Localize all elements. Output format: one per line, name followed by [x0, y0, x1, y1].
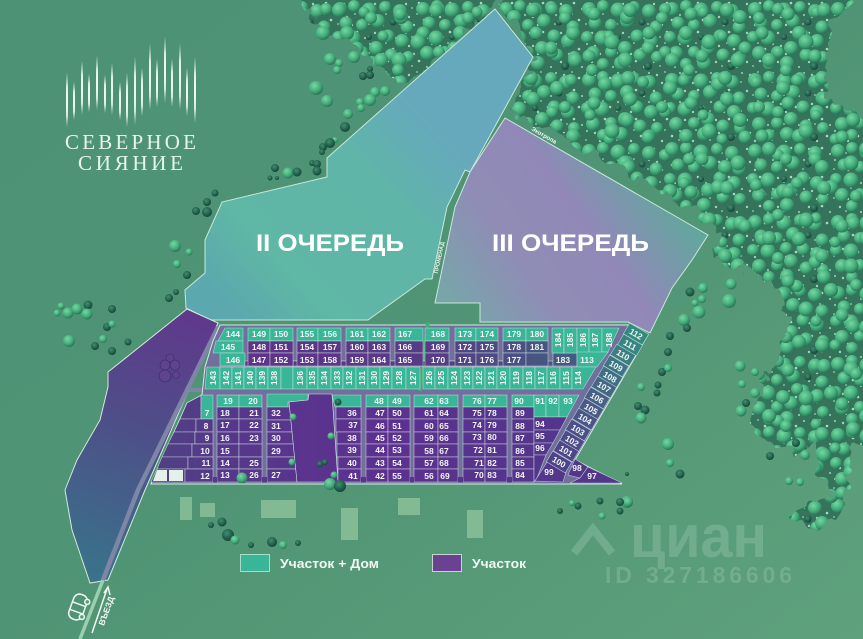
upper purple rows: 170 [431, 355, 445, 365]
watermark [574, 503, 792, 588]
plot map backing with access roads [151, 325, 648, 484]
upper teal row: 155 [300, 329, 314, 339]
trees inside the plots [236, 398, 346, 492]
lower plots, columns 36 to 90: 44 [375, 445, 385, 455]
logo wordmark [65, 130, 196, 175]
upper purple rows: 177 [507, 355, 521, 365]
lower plots, columns 36 to 90: 65 [439, 421, 449, 431]
long teal row: 134 [319, 371, 329, 385]
long teal row: 136 [295, 371, 305, 385]
purple tree cluster [159, 354, 180, 382]
diagonal strip plots 100 to 112: 100 [550, 454, 568, 470]
upper teal row: 167 [398, 329, 412, 339]
long teal row: 115 [561, 371, 571, 385]
lower plots, columns 36 to 90: 52 [392, 433, 402, 443]
lower plots, columns 36 to 90: 60 [424, 421, 434, 431]
upper purple rows: 165 [398, 355, 412, 365]
long teal row: 117 [536, 371, 546, 385]
lower plots, columns 13 to 32: 17 [220, 420, 230, 430]
plots 91 to 99: 99 [544, 467, 554, 477]
upper teal row: 145 [221, 342, 235, 352]
long teal row: 130 [369, 371, 379, 385]
lower plots, columns 36 to 90: 78 [487, 408, 497, 418]
plots 91 to 99: 96 [535, 443, 545, 453]
upper right teal plots [552, 328, 619, 367]
plots 91 to 99: 92 [548, 396, 558, 406]
lower plots, columns 36 to 90: 62 [424, 396, 434, 406]
upper purple rows: 176 [480, 355, 494, 365]
long teal row: 123 [462, 371, 472, 385]
upper purple rows: 181 [530, 342, 544, 352]
long teal row: 116 [548, 371, 558, 385]
upper purple rows: 171 [458, 355, 472, 365]
long teal row: 118 [524, 371, 534, 385]
lower plots, columns 13 to 32: 29 [271, 446, 281, 456]
lower plots, columns 36 to 90: 57 [424, 458, 434, 468]
upper purple rows: 160 [350, 342, 364, 352]
long teal row: 114 [573, 371, 583, 385]
upper purple rows: 178 [507, 342, 521, 352]
upper purple rows: 166 [398, 342, 412, 352]
diagonal strip plots 100 to 112: 111 [622, 337, 638, 353]
forest [302, 0, 863, 530]
lower plots, columns 36 to 90: 69 [440, 471, 450, 481]
watermark: ID 327186606 [605, 562, 792, 588]
phase II heading: II ОЧЕРЕДЬ [256, 230, 404, 257]
diagonal strip plots 100 to 112: 104 [576, 411, 594, 427]
lower plots, columns 13 to 32: 20 [248, 396, 258, 406]
upper teal row: 150 [274, 329, 288, 339]
upper right teal plots: 188 [604, 333, 614, 347]
upper teal row: 174 [480, 329, 494, 339]
long teal row [205, 367, 596, 389]
upper purple rows: 153 [300, 355, 314, 365]
lower plots, columns 36 to 90: 85 [515, 458, 525, 468]
logo wordmark: СИЯНИЕ [78, 151, 183, 175]
lower plots, columns 36 to 90: 47 [375, 408, 385, 418]
upper purple rows: 151 [274, 342, 288, 352]
lower plots, columns 36 to 90: 81 [487, 445, 497, 455]
lower plots, columns 36 to 90: 40 [347, 458, 357, 468]
lower plots, columns 13 to 32: 14 [220, 458, 230, 468]
lower plots, columns 13 to 32: 13 [220, 470, 230, 480]
upper teal row: 144 [226, 329, 240, 339]
long teal row: 119 [511, 371, 521, 385]
upper purple rows: 159 [350, 355, 364, 365]
upper teal row: 161 [350, 329, 364, 339]
lower plots, columns 36 to 90: 83 [487, 470, 497, 480]
lower plots, columns 36 to 90: 67 [439, 446, 449, 456]
plots 91 to 99: 95 [535, 431, 545, 441]
lower plots, columns 13 to 32: 30 [271, 433, 281, 443]
lower plots, columns 36 to 90: 74 [472, 420, 482, 430]
lower plots, columns 36 to 90 [332, 395, 534, 482]
lower plots, columns 36 to 90: 43 [375, 458, 385, 468]
legend: plot with house [240, 554, 379, 572]
diagonal strip plots 100 to 112: 102 [563, 433, 581, 449]
left lower block: 10 [200, 446, 210, 456]
diagonal strip plots 100 to 112: 112 [628, 326, 645, 342]
lower plots, columns 36 to 90: 80 [487, 432, 497, 442]
diagonal strip plots 100 to 112: 103 [569, 422, 587, 438]
lower plots, columns 13 to 32: 31 [271, 421, 281, 431]
long teal row: 124 [449, 371, 459, 385]
left lower block: 11 [202, 458, 211, 468]
upper purple rows: 152 [274, 355, 288, 365]
upper right teal plots: 185 [565, 333, 575, 347]
lower plots, columns 36 to 90: 41 [348, 471, 358, 481]
lower plots, columns 36 to 90: 46 [375, 421, 385, 431]
long teal row: 121 [486, 371, 496, 385]
lower plots, columns 36 to 90: 50 [392, 408, 402, 418]
lower plots, columns 36 to 90: 48 [374, 396, 384, 406]
lower plots, columns 36 to 90: 37 [348, 420, 358, 430]
lower plots, columns 36 to 90: 59 [424, 433, 434, 443]
central purple plot [289, 394, 338, 482]
long teal row: 133 [332, 371, 342, 385]
houses outside the plots [180, 497, 483, 540]
lower plots, columns 36 to 90: 77 [487, 396, 497, 406]
entry road [80, 327, 218, 639]
eco path label: Экотропа [530, 127, 558, 146]
lower plots, columns 36 to 90: 75 [472, 408, 482, 418]
plots 91 to 99: 94 [535, 419, 545, 429]
lower plots, columns 36 to 90: 58 [424, 446, 434, 456]
arrow: entry direction [92, 587, 110, 633]
plots 91 to 99: 93 [563, 396, 573, 406]
left lower block: 8 [204, 421, 209, 431]
lower plots, columns 36 to 90: 36 [347, 408, 357, 418]
long teal row: 138 [269, 371, 279, 385]
lower plots, columns 36 to 90: 66 [439, 433, 449, 443]
long teal row: 125 [436, 371, 446, 385]
lower plots, columns 36 to 90: 38 [347, 433, 357, 443]
lower plots, columns 13 to 32 [217, 394, 308, 482]
plots 91 to 99: 97 [587, 471, 597, 481]
upper purple rows: 175 [480, 342, 494, 352]
upper right teal plots: 113 [580, 355, 594, 365]
upper teal row: 180 [530, 329, 544, 339]
road ends joined at bottom [213, 477, 512, 482]
left purple parcel [65, 309, 218, 583]
lower plots, columns 36 to 90: 72 [473, 445, 483, 455]
lower plots, columns 36 to 90: 39 [347, 445, 357, 455]
lower plots, columns 13 to 32: 18 [220, 408, 230, 418]
entry label: ВЪЕЗД [96, 595, 116, 627]
long teal row: 131 [357, 371, 367, 385]
diagonal strip plots 100 to 112: 105 [582, 401, 600, 417]
lower plots, columns 36 to 90: 61 [424, 408, 434, 418]
lower plots, columns 36 to 90: 68 [439, 458, 449, 468]
upper teal row: 179 [507, 329, 521, 339]
lower plots, columns 36 to 90: 76 [472, 396, 482, 406]
plots 91 to 99: 98 [572, 463, 582, 473]
upper right teal plots: 187 [590, 333, 600, 347]
lower plots, columns 36 to 90: 42 [375, 471, 385, 481]
promenade label: ПРОМЕНАД [434, 241, 446, 274]
long teal row: 128 [394, 371, 404, 385]
long teal row: 126 [424, 371, 434, 385]
long teal row: 141 [233, 371, 243, 385]
lower plots, columns 36 to 90: 89 [515, 408, 525, 418]
scattered trees [54, 26, 810, 549]
lower plots, columns 13 to 32: 15 [220, 446, 230, 456]
upper purple rows: 154 [300, 342, 314, 352]
lower plots, columns 36 to 90: 54 [392, 458, 402, 468]
phase III area [435, 118, 708, 333]
lower plots, columns 36 to 90: 86 [515, 446, 525, 456]
lower plots, columns 36 to 90: 55 [392, 471, 402, 481]
lower plots, columns 36 to 90: 84 [515, 470, 525, 480]
watermark: циан [630, 503, 767, 570]
lower plots, columns 13 to 32: 21 [249, 408, 259, 418]
legend: plot [432, 554, 527, 572]
lower plots, columns 36 to 90: 49 [392, 396, 402, 406]
lower plots, columns 13 to 32: 32 [271, 408, 281, 418]
upper right teal plots: 184 [553, 333, 563, 347]
icon: car [67, 592, 91, 622]
left lower block: 12 [200, 471, 210, 481]
legend: plot: Участок [472, 557, 527, 571]
lower plots, columns 13 to 32: 22 [249, 420, 259, 430]
left lower block: 9 [205, 433, 210, 443]
upper purple rows: 157 [323, 342, 337, 352]
lower plots, columns 36 to 90: 64 [439, 408, 449, 418]
lower plots, columns 36 to 90: 45 [375, 433, 385, 443]
upper purple rows: 158 [323, 355, 337, 365]
lower plots, columns 36 to 90: 51 [392, 421, 402, 431]
upper teal row: 146 [226, 355, 240, 365]
lower plots, columns 36 to 90: 53 [392, 445, 402, 455]
upper purple rows: 169 [431, 342, 445, 352]
long teal row: 135 [307, 371, 317, 385]
lower plots, columns 36 to 90: 90 [514, 396, 524, 406]
lower plots, columns 36 to 90: 82 [487, 458, 497, 468]
promenade strip through plots [420, 322, 428, 391]
long teal row: 143 [208, 371, 218, 385]
long teal row: 122 [474, 371, 484, 385]
diagonal strip plots 100 to 112: 106 [588, 390, 606, 406]
long teal row: 140 [245, 371, 255, 385]
lower plots, columns 36 to 90: 71 [474, 458, 484, 468]
lower plots, columns 36 to 90: 73 [472, 432, 482, 442]
logo rays [66, 37, 196, 127]
phase II area [185, 9, 533, 320]
upper purple rows: 148 [252, 342, 266, 352]
lower plots, columns 13 to 32: 25 [249, 458, 259, 468]
diagonal strip plots 100 to 112: 101 [557, 443, 575, 459]
plots 91 to 99: 91 [535, 396, 545, 406]
diagonal strip plots 100 to 112: 108 [601, 369, 619, 385]
long teal row: 139 [257, 371, 267, 385]
long teal row: 120 [498, 371, 508, 385]
upper purple rows: 172 [458, 342, 472, 352]
upper purple rows: 183 [556, 355, 570, 365]
long teal row: 142 [221, 371, 231, 385]
upper purple rows: 164 [372, 355, 386, 365]
upper teal row: 156 [323, 329, 337, 339]
phase III heading: III ОЧЕРЕДЬ [492, 230, 649, 257]
lower plots, columns 36 to 90: 70 [474, 470, 484, 480]
lower plots, columns 13 to 32: 23 [249, 433, 259, 443]
left lower block: 7 [205, 408, 210, 418]
lower plots, columns 36 to 90: 63 [439, 396, 449, 406]
upper teal row: 173 [458, 329, 472, 339]
lower plots, columns 13 to 32: 19 [223, 396, 233, 406]
upper teal row: 149 [252, 329, 266, 339]
upper right teal plots: 186 [578, 333, 588, 347]
upper purple rows [245, 341, 577, 366]
lower plots, columns 36 to 90: 87 [515, 433, 525, 443]
long teal row: 132 [344, 371, 354, 385]
diagonal strip plots 100 to 112: 109 [607, 358, 625, 374]
upper purple rows: 147 [252, 355, 266, 365]
diagonal strip plots 100 to 112: 110 [615, 347, 632, 363]
upper purple rows: 163 [372, 342, 386, 352]
upper teal row: 162 [372, 329, 386, 339]
logo wordmark: СЕВЕРНОЕ [65, 130, 196, 154]
long teal row: 127 [408, 371, 418, 385]
diagonal strip plots 100 to 112 [546, 323, 649, 473]
lower plots, columns 36 to 90: 79 [487, 420, 497, 430]
left lower block [151, 395, 213, 482]
upper teal row [213, 328, 548, 366]
lower plots, columns 13 to 32: 16 [220, 433, 230, 443]
lower plots, columns 36 to 90: 88 [515, 421, 525, 431]
upper teal row: 168 [431, 329, 445, 339]
diagonal strip plots 100 to 112: 107 [595, 379, 613, 395]
lower plots, columns 36 to 90: 56 [424, 471, 434, 481]
legend: plot with house: Участок + Дом [280, 557, 379, 571]
long teal row: 129 [381, 371, 391, 385]
blank white plots [153, 470, 183, 481]
lower plots, columns 13 to 32: 27 [271, 470, 281, 480]
plots 91 to 99 [534, 395, 622, 483]
lower plots, columns 13 to 32: 26 [249, 470, 259, 480]
